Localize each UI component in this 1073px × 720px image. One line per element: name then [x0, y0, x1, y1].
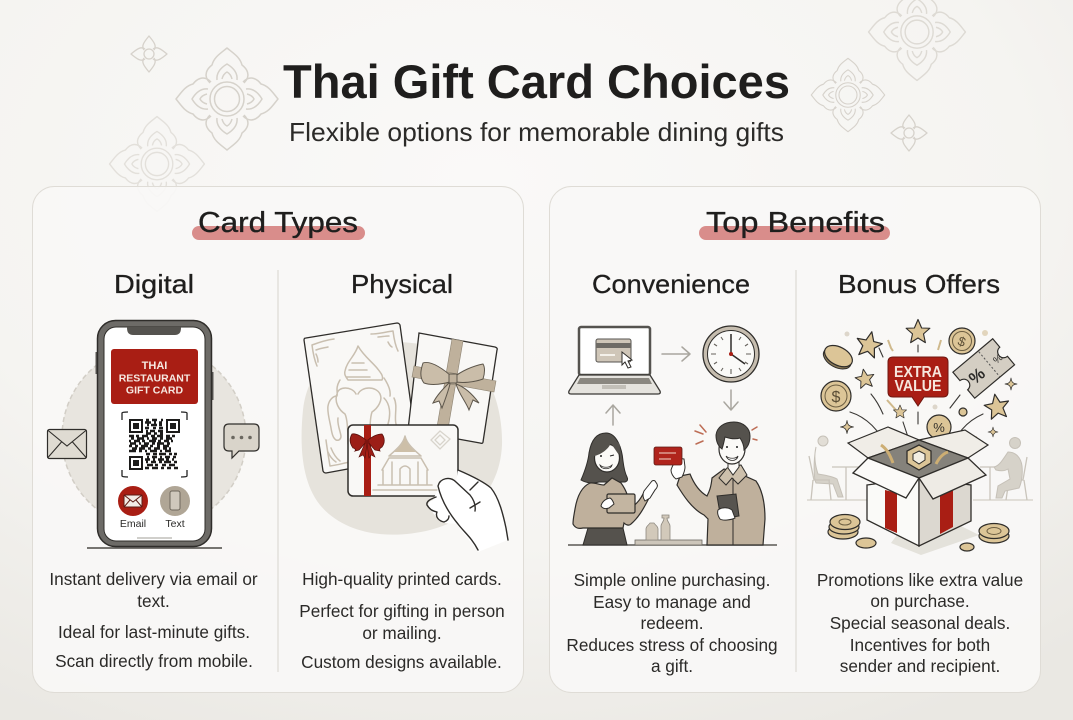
column heading: bonus offers: Bonus Offers	[838, 269, 1000, 299]
panel: top benefits	[550, 186, 1040, 692]
coins	[820, 328, 975, 439]
text: convenience benefits: Easy to manage and	[593, 592, 751, 612]
hand	[427, 470, 508, 552]
text: digital benefits: Scan directly from mobile.	[55, 651, 253, 671]
text: digital benefits: Ideal for last-minute gifts.	[58, 622, 250, 642]
text: convenience benefits: Simple online purchasing.	[574, 570, 770, 590]
column heading: convenience: Convenience	[592, 269, 750, 299]
card: ribbon gift card	[408, 333, 497, 443]
text: bonus benefits: Promotions like extra value	[817, 570, 1023, 590]
man with red card	[654, 422, 765, 545]
text: digital benefits: Instant delivery via email or	[49, 569, 258, 589]
text: digital benefits	[49, 569, 258, 671]
coins: $	[956, 333, 969, 350]
red gift card banner: GIFT CARD	[126, 384, 183, 396]
text: bonus benefits: Special seasonal deals.	[830, 613, 1010, 633]
stars	[840, 320, 1017, 437]
title: Thai Gift Card Choices	[283, 55, 790, 108]
column heading: physical: Physical	[351, 269, 453, 299]
arrow: people to laptop	[606, 405, 620, 425]
text button	[160, 486, 190, 530]
clock	[703, 326, 759, 382]
text: physical benefits: Perfect for gifting in person	[299, 601, 505, 621]
coin stacks	[828, 514, 1009, 551]
discount ticket	[953, 339, 1015, 398]
heading: top benefits: Top Benefits	[706, 207, 885, 239]
column heading: digital: Digital	[114, 269, 194, 299]
text: convenience benefits: a gift.	[651, 656, 693, 676]
background Thai floral ornaments	[110, 0, 965, 211]
text: convenience benefits	[566, 570, 778, 676]
text: convenience benefits: redeem.	[640, 613, 704, 633]
subtitle: Flexible options for memorable dining gifts	[289, 117, 784, 147]
red gift card banner: RESTAURANT	[119, 372, 191, 384]
heading underline: top benefits	[699, 226, 890, 240]
panel: card types	[32, 186, 524, 692]
text: physical benefits: Custom designs available.	[301, 652, 502, 672]
text: physical benefits	[299, 569, 505, 672]
illustration: physical gift cards and hand	[302, 323, 508, 552]
email button	[118, 486, 148, 530]
open gift box	[848, 427, 988, 555]
red card	[654, 447, 682, 465]
text: convenience benefits: Reduces stress of choosing	[566, 635, 778, 655]
illustration: bonus gift box	[807, 320, 1033, 555]
text: bonus benefits: Incentives for both	[850, 635, 990, 655]
red gift card banner: THAI	[142, 360, 167, 372]
illustration: phone with QR gift card	[62, 320, 246, 548]
sparks and rays	[850, 345, 983, 458]
heading: card types: Card Types	[198, 207, 358, 239]
text: bonus benefits: on purchase.	[870, 591, 970, 611]
excitement marks	[695, 425, 757, 444]
text: bonus benefits: sender and recipient.	[840, 656, 1000, 676]
counter with bottles	[635, 515, 702, 545]
extra value callout	[888, 357, 948, 406]
card: red ribbon temple card	[348, 425, 458, 496]
text: digital benefits: text.	[137, 591, 170, 611]
discount ticket: %	[965, 364, 989, 388]
text: physical benefits: High-quality printed cards.	[302, 569, 502, 589]
email button: Email	[120, 518, 146, 530]
icon: message bubble	[224, 424, 259, 458]
extra value callout: VALUE	[894, 378, 942, 395]
woman with tablet	[573, 433, 657, 545]
icon: envelope	[48, 430, 86, 458]
faded diners	[807, 436, 1033, 500]
discount ticket: %	[991, 352, 1005, 367]
text button: Text	[165, 518, 185, 530]
arrow: laptop to clock	[662, 347, 690, 361]
extra value callout: EXTRA	[894, 364, 942, 381]
illustration: convenience cycle	[568, 326, 777, 545]
text: bonus benefits	[817, 570, 1023, 676]
red gift card banner	[111, 349, 198, 404]
ground line	[568, 544, 777, 546]
coins: $	[832, 389, 841, 406]
QR code	[122, 412, 187, 477]
laptop	[569, 327, 660, 394]
text: physical benefits: or mailing.	[362, 623, 442, 643]
arrow: clock to people	[724, 390, 738, 410]
coins: %	[933, 420, 945, 435]
card: elephants	[304, 323, 418, 473]
heading underline: card types	[192, 226, 365, 240]
